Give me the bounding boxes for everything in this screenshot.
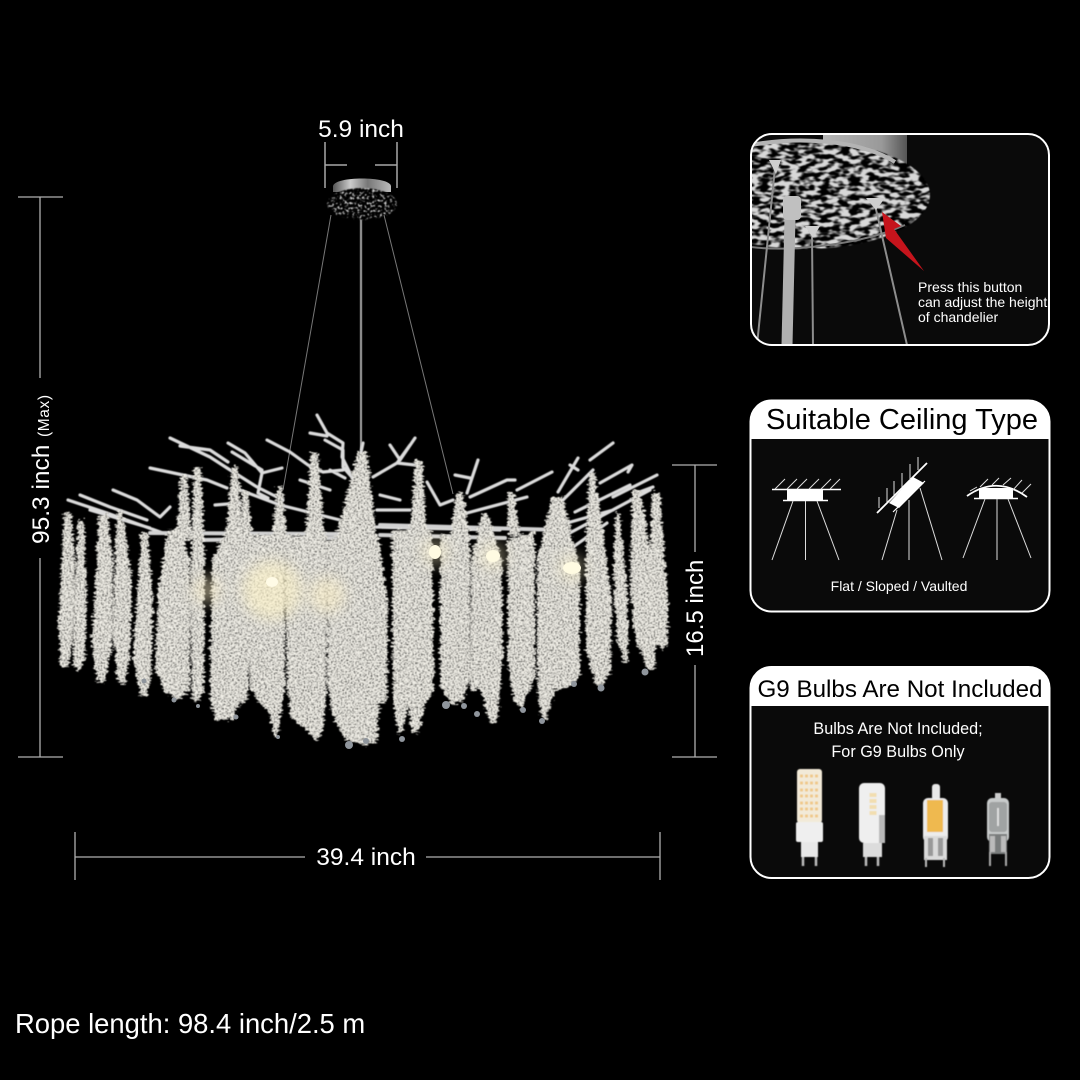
bulb: clear halogen <box>987 793 1009 866</box>
bulb: frosted capsule LED <box>859 783 885 866</box>
note: For G9 Bulbs Only <box>831 743 965 761</box>
icon: sloped ceiling <box>877 457 942 560</box>
note: Bulbs Are Not Included; <box>813 720 983 738</box>
caption <box>918 279 1047 325</box>
icon: vaulted ceiling <box>963 478 1031 560</box>
main horizontal frame <box>150 525 560 540</box>
icon: flat ceiling <box>772 479 841 560</box>
dimension: canopy width 5.9 inch: 5.9 inch <box>318 116 404 143</box>
dimension: canopy width 5.9 inch <box>318 116 404 188</box>
note <box>813 720 983 761</box>
dimension: width 39.4 inch: 39.4 inch <box>316 844 416 871</box>
chandelier illustration <box>59 178 668 749</box>
warm bulb glows <box>193 538 586 620</box>
side cords <box>283 215 453 494</box>
bulb: ceramic corn LED <box>796 769 823 866</box>
dimension: total height 95.3 inch (Max): (Max) <box>36 394 53 437</box>
panel: suitable ceiling type <box>750 400 1050 612</box>
caption: of chandelier <box>918 309 999 325</box>
heading: Suitable Ceiling Type <box>766 404 1038 436</box>
dimension: total height 95.3 inch (Max) <box>18 197 63 757</box>
caption: can adjust the height <box>918 294 1047 310</box>
heading: G9 Bulbs Are Not Included <box>757 676 1043 703</box>
header <box>750 667 1050 706</box>
ceiling plate photo <box>752 135 931 344</box>
caption: Press this button <box>918 279 1022 295</box>
silver branches <box>68 415 657 547</box>
bulb: COB LED <box>923 784 948 867</box>
panel: G9 bulbs not included <box>750 667 1050 878</box>
dimension: body height 16.5 inch: 16.5 inch <box>682 560 709 657</box>
canopy <box>327 178 397 220</box>
caption: Flat / Sloped / Vaulted <box>831 578 967 594</box>
header <box>750 401 1050 439</box>
red arrow <box>882 212 924 271</box>
crystal strands <box>59 452 668 745</box>
dimension: body height 16.5 inch <box>672 465 717 757</box>
dimension: total height 95.3 inch (Max): 95.3 inch <box>28 445 55 544</box>
dimension: width 39.4 inch <box>75 832 660 880</box>
panel: height adjustment button <box>750 133 1050 346</box>
rope length note: Rope length: 98.4 inch/2.5 m <box>15 1008 365 1039</box>
suspension rod and cords <box>360 212 362 450</box>
hanging crystal drops <box>142 668 648 749</box>
